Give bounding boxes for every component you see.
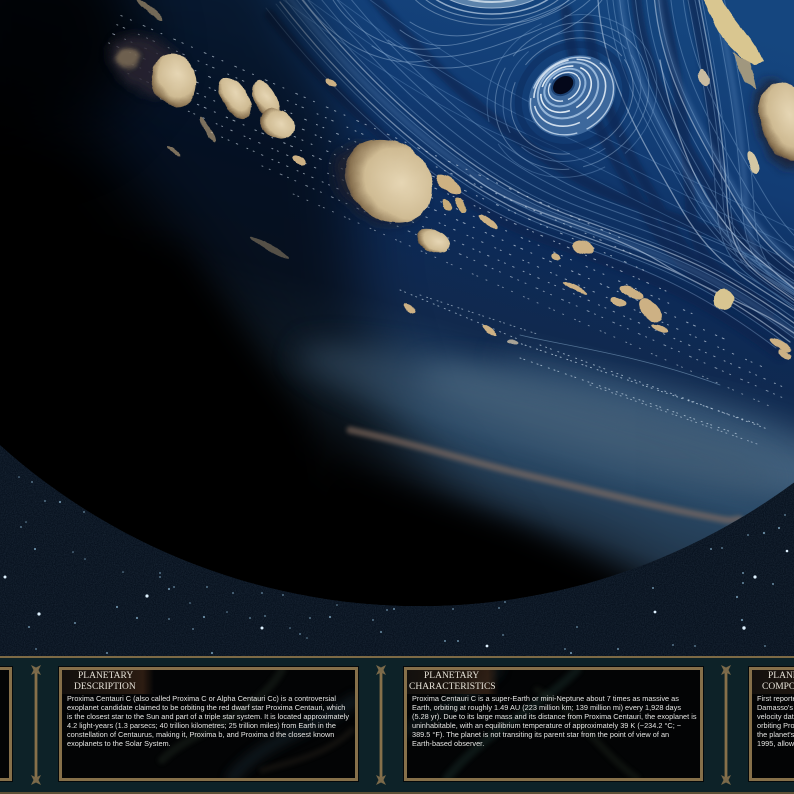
rock: upper right ridge	[702, 0, 763, 65]
body text: the planet's	[757, 730, 794, 739]
rock: far left	[106, 32, 197, 108]
texture: heading backdrop	[407, 670, 499, 694]
ornament: divider 2	[376, 665, 386, 785]
body text: (5.28 yr). Due to its large mass and its distance from Proxima Centauri, the exoplanet is	[412, 712, 696, 721]
pale orange cloud streak	[350, 430, 740, 520]
body text: 389.5 °F). The planet is not transiting its parent star from the point of view of an	[412, 730, 669, 739]
body text: 4.2 light-years (1.3 parsecs; 40 trillion kilometres; 25 trillion miles) from Earth in the	[67, 721, 336, 730]
body text: is the closest star to the Sun and part of a triple star system. It is located approximately	[67, 712, 349, 721]
body text: Damasso's	[757, 703, 793, 712]
texture: panel smoke	[159, 670, 355, 778]
texture: heading backdrop	[62, 670, 154, 694]
heading: PLANETARY	[78, 671, 133, 681]
panel: planetary description	[59, 667, 358, 781]
body text: exoplanets to the Solar System.	[67, 739, 171, 748]
speckled cloud belts	[83, 16, 794, 410]
planet base colour bands	[88, 0, 794, 574]
haze veil over terminator	[297, 336, 686, 456]
body text	[67, 694, 349, 748]
panel: planetary description: DESCRIPTION	[74, 682, 136, 692]
rock: large central	[328, 138, 466, 253]
top swirl	[415, 0, 569, 26]
body text	[412, 694, 696, 748]
panel: planetary characteristics	[404, 667, 703, 781]
rock: twin cluster	[218, 78, 296, 139]
panel: planetary characteristics: CHARACTERISTICS	[409, 682, 496, 692]
footer rule	[0, 792, 794, 794]
ornament: divider 1	[31, 665, 41, 785]
texture: panel smoke	[407, 670, 639, 778]
body text: Earth-based observer.	[412, 739, 484, 748]
planet	[0, 0, 794, 606]
rocky cloud formations	[99, 0, 794, 361]
bottom information strip	[0, 656, 794, 794]
body text: Proxima Centauri C is a super-Earth or mini-Neptune about 7 times as massive as	[412, 694, 679, 703]
body text: Proxima Centauri C (also called Proxima C or Alpha Centauri Cc) is a controversial	[67, 694, 336, 703]
panel: left edge fragment	[0, 667, 12, 781]
rock: right edge	[745, 74, 794, 176]
ornament: divider 3	[721, 665, 731, 785]
body text: uninhabitable, with an equilibrium temperature of approximately 39 K (−234.2 °C; −	[412, 721, 681, 730]
flow lines: atmospheric streaks	[230, 0, 794, 355]
vortex	[486, 14, 658, 178]
small cloud islands	[136, 0, 793, 361]
body text: exoplanet candidate claimed to be orbiting the red dwarf star Proxima Centauri, which	[67, 703, 345, 712]
heading: PLANETARY	[424, 671, 479, 681]
body text	[757, 694, 794, 748]
texture: heading backdrop	[752, 670, 794, 694]
shadow on the night side	[0, 0, 652, 606]
panel: planetary composition (cropped)	[749, 667, 794, 781]
body text: Earth, orbiting at roughly 1.49 AU (223 million km; 139 million mi) every 1,928 days	[412, 703, 681, 712]
hazy grey-blue band	[428, 349, 794, 502]
body text: constellation of Centaurus, making it, Proxima b, and Proxima d the closest known	[67, 730, 334, 739]
